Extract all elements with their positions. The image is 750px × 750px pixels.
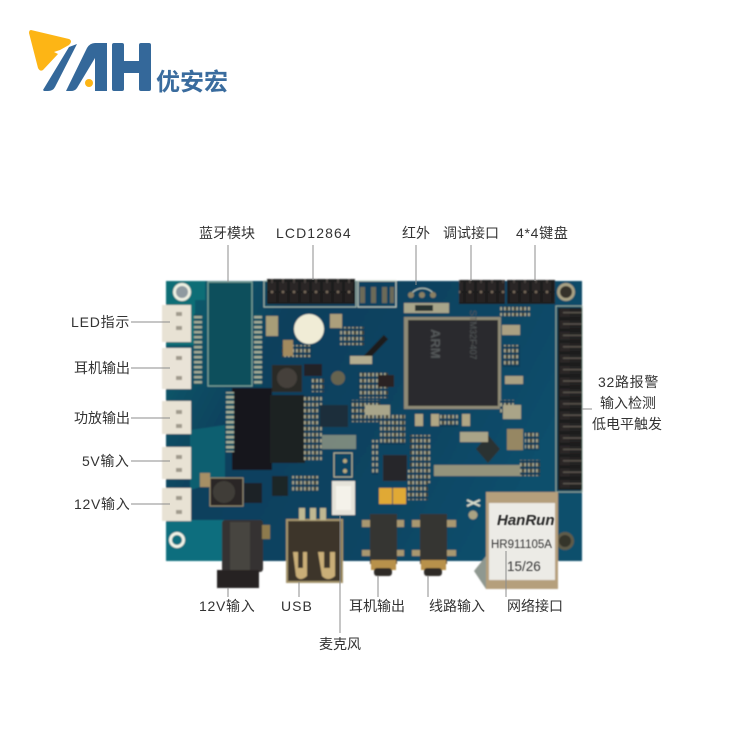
label usb: USB — [281, 598, 313, 614]
RJ45 shell — [486, 492, 558, 589]
yellow capacitors — [379, 488, 392, 504]
small components near cap — [266, 316, 278, 336]
HanRun brand: HanRun — [497, 512, 554, 529]
diode diagonal — [364, 337, 386, 360]
label lcd: LCD12864 — [276, 225, 352, 241]
inductor bottom — [210, 478, 243, 506]
logo chinese name: 优安宏 — [156, 69, 228, 96]
audio jack line in — [412, 520, 456, 527]
label debug: 调试接口 — [443, 225, 499, 241]
label 32 alarm: 32路报警 — [598, 374, 659, 390]
pcb base — [166, 281, 582, 561]
model number: HR911105A — [491, 539, 552, 551]
leader lines — [131, 245, 592, 633]
label earphone out: 耳机输出 — [74, 360, 130, 376]
crystal — [507, 429, 523, 450]
label amp out: 功放输出 — [74, 410, 130, 426]
label infrared: 红外 — [402, 225, 430, 241]
logo letters YAH — [43, 43, 151, 91]
circuit board photo — [162, 279, 582, 589]
label network: 网络接口 — [507, 598, 563, 614]
labels right — [592, 374, 662, 432]
4 pin header outline — [358, 281, 396, 307]
label led: LED指示 — [71, 314, 130, 330]
chip ARM marking: ARM — [428, 329, 443, 359]
label 12v jack: 12V输入 — [199, 598, 255, 614]
label line in: 线路输入 — [429, 598, 485, 614]
USB socket — [287, 520, 342, 582]
chip marking: STM32F407 — [468, 310, 478, 360]
white round capacitor — [294, 314, 324, 344]
QFN chip diamond — [476, 435, 500, 463]
label microphone: 麦克风 — [319, 636, 361, 652]
black IC large — [232, 388, 272, 470]
RJ45 label text — [491, 512, 554, 574]
label 12v: 12V输入 — [74, 496, 130, 512]
white connectors — [162, 305, 191, 521]
label low level: 低电平触发 — [592, 416, 662, 432]
logo yellow dot — [85, 79, 93, 87]
audio jack earphone — [362, 520, 404, 527]
white mic connector — [332, 481, 355, 515]
infrared footprint — [410, 288, 435, 296]
DC power jack — [222, 520, 263, 572]
mounting hole bottom left — [169, 532, 185, 548]
label bluetooth: 蓝牙模块 — [199, 225, 255, 241]
label 5v: 5V输入 — [82, 453, 130, 469]
label input detect: 输入检测 — [600, 395, 656, 411]
label earphone jack: 耳机输出 — [349, 598, 405, 614]
logo — [29, 30, 228, 96]
main ARM chip — [404, 317, 501, 409]
labels bottom — [199, 598, 563, 652]
right pin header — [556, 306, 582, 492]
batch number: 15/26 — [507, 559, 541, 574]
labels top — [199, 225, 569, 241]
mounting hole bottom right — [556, 532, 574, 550]
mounting hole top left — [173, 283, 191, 301]
label keypad: 4*4键盘 — [516, 225, 569, 241]
labels left — [71, 314, 130, 512]
mounting hole top right — [557, 283, 575, 301]
icon: orange arrow — [29, 30, 71, 71]
bluetooth module — [208, 282, 252, 386]
pin headers top — [264, 281, 356, 307]
inductor top — [272, 365, 302, 392]
